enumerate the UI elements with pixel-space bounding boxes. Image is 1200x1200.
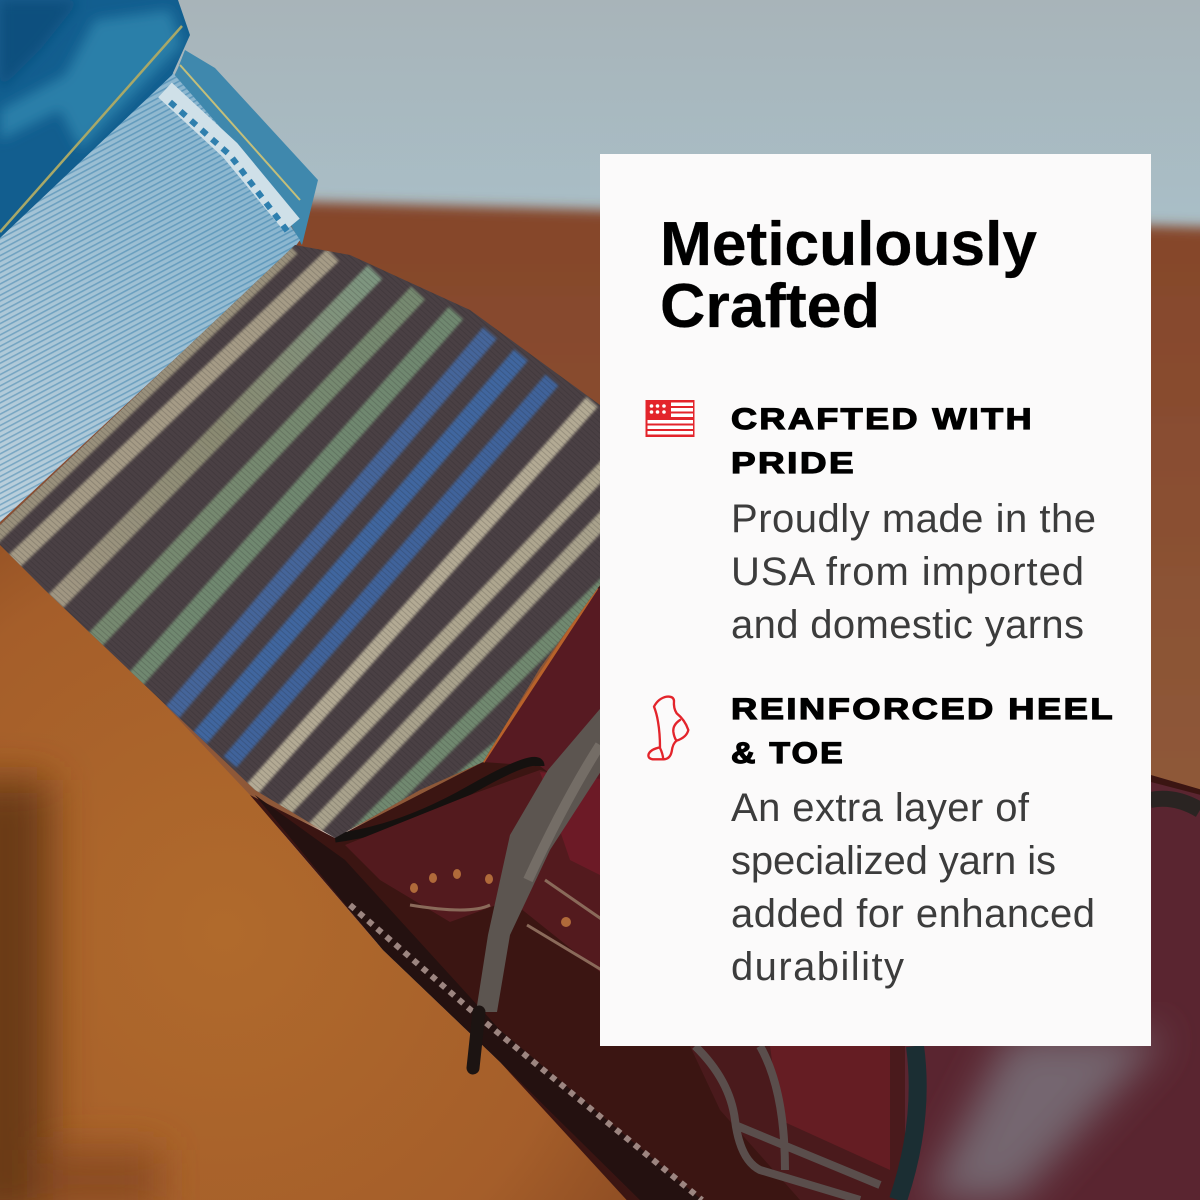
feature heading: REINFORCED HEEL (731, 693, 1115, 726)
lace tip (473, 1012, 479, 1068)
wingtip stitching (695, 1046, 880, 1200)
wooden table (0, 192, 1200, 830)
feature heading (731, 403, 1034, 480)
icon: american flag (646, 400, 694, 437)
shoelace (473, 703, 605, 1068)
heading: Meticulously (660, 210, 1038, 279)
blurred wood foreground (0, 530, 640, 1200)
feature body: added for enhanced (731, 892, 1095, 936)
feature body (731, 497, 1096, 647)
welt strip (898, 1046, 918, 1200)
feature body: specialized yarn is (731, 839, 1056, 883)
distant lace (1150, 799, 1200, 810)
outer cuff fold (165, 50, 318, 245)
blurred wall (0, 0, 1200, 240)
white hem (165, 90, 292, 225)
dark denim (0, 0, 190, 238)
feature: crafted with pride (731, 403, 1096, 647)
feature body: and domestic yarns (731, 603, 1084, 647)
heading (660, 210, 1038, 341)
yellow stitch (0, 26, 182, 232)
feature body: An extra layer of (731, 786, 1030, 830)
brogue holes (410, 869, 571, 927)
white info panel (600, 154, 1151, 1046)
heading: Crafted (660, 272, 880, 341)
shoe (250, 560, 1200, 1200)
feature heading: & TOE (731, 737, 845, 770)
striped sock (0, 245, 600, 838)
jeans (0, 0, 318, 522)
shoe stitching (410, 880, 610, 975)
shoe upper by the laces (483, 588, 610, 820)
feature body (731, 786, 1095, 989)
icon: sock with reinforced heel and toe (648, 697, 688, 759)
feature body: durability (731, 945, 904, 989)
feature heading (731, 693, 1115, 770)
feature body: Proudly made in the (731, 497, 1096, 541)
brogue panel (345, 770, 610, 980)
feature body: USA from imported (731, 550, 1084, 594)
light denim cuff (0, 72, 300, 522)
feature heading: CRAFTED WITH (731, 403, 1034, 436)
feature: reinforced heel and toe (731, 693, 1115, 989)
lower right leather (905, 780, 1200, 1200)
feature heading: PRIDE (731, 447, 856, 480)
shoe rim (335, 761, 540, 838)
red wingtip (690, 1046, 905, 1200)
sole edge (255, 795, 702, 1200)
